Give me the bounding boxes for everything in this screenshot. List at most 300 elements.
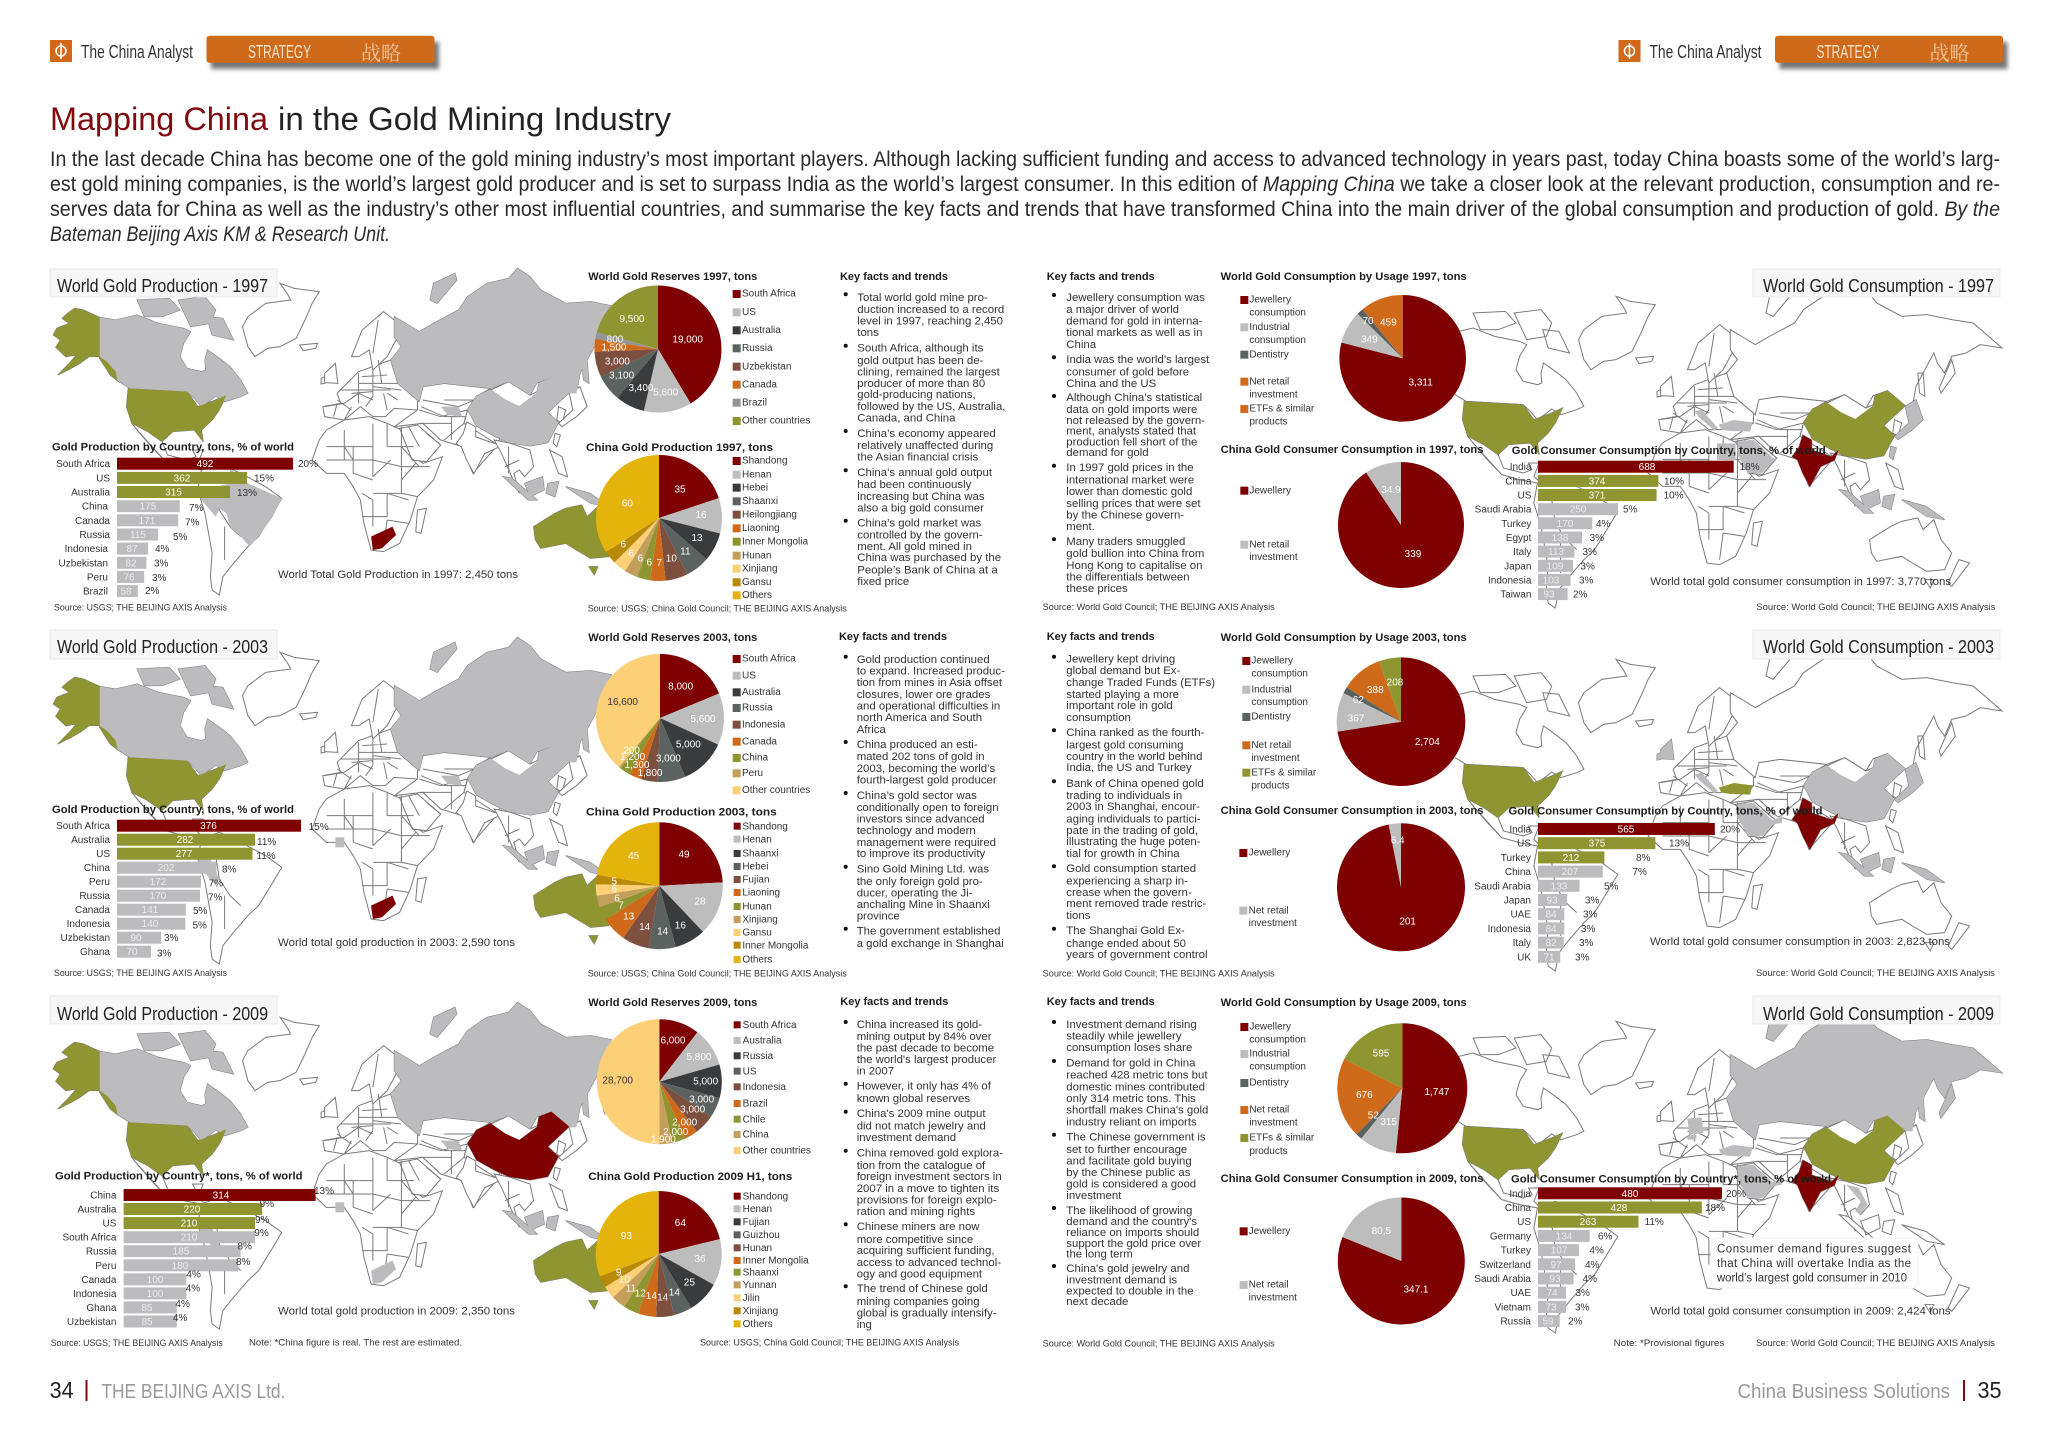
bar chart: production by country: 170	[150, 891, 167, 902]
text block: China ranked as the fourth-	[1066, 727, 1205, 739]
text block: industry reliant on imports	[1066, 1116, 1197, 1128]
bar chart: consumption by country: India	[1509, 824, 1531, 836]
bar chart: production by country: 376	[200, 821, 217, 832]
text block: Hong Kong to capitalise on	[1066, 560, 1202, 572]
heading: Key facts and trends	[839, 631, 947, 643]
pie values: 201	[1399, 916, 1416, 927]
pie values: 28	[694, 896, 706, 907]
legend: reserves	[733, 654, 810, 796]
legend: China production: Inner Mongolia	[742, 940, 809, 951]
pie values: 3,400	[628, 383, 654, 394]
legend: usage: investment	[1251, 753, 1300, 764]
icon: China Analyst logo	[1618, 40, 1640, 62]
heading: World Gold Consumption - 2003	[1763, 637, 1994, 657]
panel: reserves and China production 2009	[588, 997, 959, 1348]
pie values: 16	[675, 921, 686, 932]
pie values: 200	[623, 746, 640, 757]
bar chart: consumption by country: 428	[1611, 1203, 1628, 1214]
legend: China production: Henan	[743, 1204, 772, 1215]
text block: illustrating the huge poten-	[1066, 836, 1201, 848]
text block: in 2007	[857, 1066, 894, 1078]
icon: China Analyst logo	[50, 40, 72, 62]
text block: 2003, becoming the world’s	[857, 763, 995, 775]
legend: reserves: Australia	[742, 687, 781, 698]
pie values: 28,700	[602, 1076, 633, 1087]
bar chart: production by country: 9%	[260, 1199, 274, 1210]
legend: usage: consumption	[1249, 335, 1306, 346]
pie chart: usage 1997	[1371, 327, 1434, 390]
text block: Jewellery consumption was	[1066, 292, 1205, 304]
bar chart: consumption by country: Saudi Arabia	[1475, 505, 1532, 516]
text block: access to advanced technol-	[857, 1257, 1001, 1269]
bar chart: production by country: 8%	[236, 1257, 251, 1268]
legend: reserves: Russia	[742, 703, 773, 714]
panel: key facts consumption 2003	[1043, 631, 1275, 978]
pie values: 1,300	[624, 760, 650, 771]
text block: only 314 metric tons. This	[1066, 1093, 1196, 1105]
text block: increasing but China was	[857, 491, 985, 503]
bar chart: production by country: 8%	[238, 1242, 252, 1252]
callout	[1711, 1238, 1918, 1288]
heading: World Gold Consumption - 1997	[1763, 276, 1994, 296]
panel: world gold consumption 2003	[1221, 630, 2002, 978]
bar chart: production by country: US	[96, 849, 110, 860]
legend: usage	[1242, 656, 1317, 791]
bullets	[1052, 293, 1056, 541]
pie values: 16	[695, 510, 707, 521]
bar chart: production by country: 9%	[254, 1228, 269, 1239]
intro text block: serves data for China as well as the industry’s other most influential countries, and summarise the key facts and trends that have transformed China into the main driver of the global consumption and production of gold. By the	[50, 198, 2000, 221]
text block: Jewellery kept driving	[1066, 654, 1175, 666]
panel: world gold consumption 1997	[1221, 269, 2002, 612]
legend: reserves: Russia	[742, 343, 773, 354]
pie values: 1,747	[1424, 1087, 1450, 1098]
section tab: STRATEGY	[248, 42, 311, 62]
pie values: 315	[1380, 1117, 1397, 1128]
source: Source: USGS; China Gold Council; THE BEIJING AXIS Analysis	[588, 968, 847, 978]
bar chart: consumption by country: Italy	[1513, 938, 1531, 949]
bar chart: consumption by country: 3%	[1580, 561, 1595, 572]
callout: Consumer demand figures suggest	[1717, 1244, 1912, 1256]
pie values: 208	[1387, 677, 1404, 688]
legend: China production	[734, 821, 809, 966]
bar chart: consumption by country: 13%	[1669, 839, 1689, 850]
bar chart: consumption by country: 4%	[1589, 1246, 1604, 1257]
text block: to improve its productivity	[857, 848, 986, 860]
source: Source: World Gold Council; THE BEIJING AXIS Analysis	[1043, 602, 1275, 612]
text block: level in 1997, reaching 2,450	[857, 316, 1003, 328]
bar chart: consumption by country: 371	[1589, 490, 1606, 502]
bar chart: production by country	[52, 804, 329, 960]
text block: aging individuals to partici-	[1066, 814, 1201, 826]
text block: Sino Gold Mining Ltd. was	[857, 864, 989, 876]
pie values: 1,900	[651, 1135, 676, 1146]
bar chart: production by country: 141	[142, 905, 159, 916]
bar chart: consumption by country: 11%	[1644, 1217, 1664, 1228]
text block: 2007 in a move to tighten its	[857, 1183, 999, 1195]
bar chart: consumption by country: 8%	[1636, 853, 1651, 864]
bar chart: production by country: 172	[150, 877, 167, 888]
text block: and operational difficulties in	[857, 700, 1000, 712]
total consumption note: World total gold consumer consumption in 2009: 2,424 tons	[1650, 1306, 1951, 1318]
text block: to expand. Increased produc-	[857, 666, 1005, 678]
heading: Key facts and trends	[1047, 996, 1155, 1008]
panel: reserves and China production 2003	[586, 632, 847, 978]
text block: followed by the US, Australia,	[857, 401, 1005, 413]
text block: provisions for foreign explo-	[857, 1194, 997, 1206]
legend: China consumption: investment	[1249, 918, 1297, 929]
source: Source: World Gold Council; THE BEIJING AXIS Analysis	[1756, 1338, 1996, 1348]
bar chart: production by country: 314	[213, 1190, 230, 1202]
legend: reserves: Peru	[742, 768, 763, 779]
bar chart: consumption by country: 5%	[1623, 505, 1638, 516]
heading: World Gold Production - 2009	[57, 1004, 268, 1024]
legend: reserves: US	[742, 670, 756, 681]
bar chart: production by country: Indonesia	[65, 544, 108, 555]
pie values	[602, 1035, 719, 1146]
text block: gold bullion into China from	[1066, 548, 1204, 560]
text block: India, the US and Turkey	[1066, 762, 1192, 774]
intro text block: Bateman Beijing Axis KM & Research Unit.	[50, 223, 390, 246]
panel: world gold production 2009	[50, 996, 666, 1348]
title: in the Gold Mining Industry	[278, 101, 671, 137]
source: Source: USGS; THE BEIJING AXIS Analysis	[51, 1338, 223, 1348]
text block: ment removed trade restric-	[1066, 898, 1206, 910]
legend: reserves: Other countries	[743, 1146, 811, 1157]
pie values: 6	[614, 893, 620, 904]
bar chart: production by country: 115	[130, 530, 146, 541]
text block: tion from mines in Asia offset	[857, 677, 1003, 689]
text block: years of government control	[1066, 949, 1207, 961]
text block: acquiring sufficient funding,	[857, 1245, 995, 1257]
bar chart: consumption by country: 93	[1549, 1274, 1561, 1285]
pie values: 9,500	[619, 314, 645, 325]
text block: foreign investment sectors in	[857, 1171, 1002, 1183]
text block: not released by the govern-	[1066, 415, 1205, 427]
legend: usage: Net retail	[1251, 740, 1291, 751]
pie values: 34.9	[1381, 485, 1401, 496]
bar chart: production by country: Ghana	[86, 1303, 117, 1314]
bar chart: production by country: 7%	[208, 892, 223, 904]
legend: China consumption: investment	[1249, 552, 1298, 563]
bullets	[844, 292, 848, 523]
note: Note: *China figure is real. The rest are estimated.	[249, 1337, 462, 1347]
pie values: 35	[674, 484, 686, 495]
pie chart: usage 2003	[1369, 690, 1433, 754]
pie values: 64	[675, 1218, 686, 1229]
text block: by the Chinese govern-	[1066, 510, 1184, 522]
text block: duction increased to a record	[857, 304, 1004, 316]
text block: relatively unaffected during	[857, 440, 993, 452]
text block: important role in gold	[1066, 700, 1173, 712]
bar chart: consumption by country: Italy	[1513, 547, 1531, 558]
bar chart: production by country: Ghana	[80, 947, 110, 958]
section tab	[206, 36, 439, 69]
text block: gold output has been de-	[857, 355, 984, 367]
total consumption note: World total gold consumer consumption in 1997: 3,770 tons	[1650, 576, 1952, 588]
bar chart: consumption by country: India	[1509, 1189, 1531, 1200]
bar chart: production by country: Peru	[87, 572, 108, 583]
bar chart: production by country: 4%	[186, 1284, 200, 1294]
legend: usage: products	[1251, 780, 1290, 791]
panel: key facts production 2009	[840, 996, 1003, 1331]
pie values: 6	[621, 540, 627, 551]
legend: reserves: US	[743, 1066, 757, 1077]
text block: trading to individuals in	[1066, 790, 1182, 802]
heading: reserves: World Gold Reserves 2003, tons	[588, 632, 757, 644]
legend: China production: Guizhou	[743, 1230, 780, 1241]
pie values: 3,100	[609, 371, 635, 382]
pie values: 10	[619, 1275, 630, 1286]
bar chart: consumption by country: 3%	[1582, 547, 1597, 558]
footer: left page	[50, 1377, 285, 1403]
pie values: 6	[647, 557, 653, 568]
bar chart: consumption by country: China	[1505, 867, 1531, 878]
intro text block: est gold mining companies, is the world’s largest gold producer and is set to surpass India as the world’s largest consumer. In this edition of Mapping China we take a closer look at the relevant production, consumption and re-	[50, 173, 2000, 196]
bar chart: production by country: 140	[142, 919, 159, 930]
pie values	[616, 1218, 706, 1303]
text block: Canada, and China	[857, 412, 956, 424]
text block: more competitive since	[857, 1234, 973, 1246]
legend: usage	[1240, 1022, 1315, 1157]
heading: World Gold Production - 1997	[57, 276, 268, 296]
heading: China production: China Gold Production 2003, tons	[586, 806, 777, 818]
bar chart: consumption by country: US	[1517, 490, 1532, 502]
pie values	[1361, 316, 1433, 388]
text block: experiencing a sharp in-	[1066, 876, 1188, 888]
bar chart: production by country: Uzbekistan	[61, 933, 110, 944]
legend: China production: Hunan	[743, 1243, 772, 1254]
pie values: 45	[628, 851, 640, 862]
pie values: 6	[612, 884, 618, 895]
pie values: 52	[1368, 1110, 1379, 1121]
pie values	[601, 314, 703, 399]
callout: that China will overtake India as the	[1717, 1258, 1911, 1270]
pie values: 7	[657, 558, 663, 569]
bar chart: production by country: Gold Production by Country*, tons, % of world	[55, 1170, 302, 1182]
text block: change Traded Funds (ETFs)	[1066, 677, 1215, 689]
pie values: 13	[691, 533, 703, 544]
bar chart: production by country: Russia	[79, 530, 110, 541]
text block: support the gold price over	[1066, 1238, 1201, 1250]
text block: fourth-largest gold producer	[857, 774, 997, 786]
bar chart: consumption by country	[1474, 806, 1822, 963]
text block: technology and modern	[857, 825, 976, 837]
bar chart: production by country: 11%	[257, 837, 276, 848]
panel: world gold consumption 2009	[1221, 996, 2002, 1348]
panel: world gold production 2003	[50, 630, 666, 978]
bar chart: consumption by country: 3%	[1576, 1288, 1590, 1299]
text block: the past decade to become	[857, 1042, 994, 1054]
text block: domestic mines contributed	[1066, 1082, 1205, 1094]
heading: usage: World Gold Consumption by Usage 2009, tons	[1221, 997, 1467, 1009]
footer: right page: 35	[1978, 1377, 2002, 1403]
legend: usage: consumption	[1251, 669, 1308, 680]
pie values: 6	[638, 553, 644, 564]
pie values: 349	[1361, 334, 1378, 345]
pie values: 11	[626, 1284, 637, 1295]
bar chart: consumption by country: 2%	[1568, 1317, 1583, 1328]
bar chart: consumption by country: 170	[1557, 519, 1574, 530]
legend: reserves: Indonesia	[743, 1082, 786, 1093]
bar chart: production by country: 82	[125, 558, 137, 569]
legend: China consumption: Jewellery	[1249, 1226, 1290, 1237]
legend: China production: Hunan	[742, 550, 771, 561]
legend: China production: Shandong	[742, 456, 788, 467]
pie values	[1391, 835, 1416, 927]
bar chart: consumption by country: Gold Consumer Consumption by Country*, tons, % of world	[1511, 1174, 1831, 1186]
text block: clining, remained the largest	[857, 366, 1001, 378]
source: Source: World Gold Council; THE BEIJING AXIS Analysis	[1043, 1339, 1275, 1349]
bar chart: consumption by country: Taiwan	[1500, 590, 1531, 601]
bar chart: consumption by country: 3%	[1579, 938, 1594, 949]
text block: did not match jewelry and	[857, 1120, 986, 1132]
heading: China consumption: China Gold Consumer Consumption in 1997, tons	[1221, 444, 1483, 456]
legend: China production: Heilongjiang	[742, 509, 797, 520]
bar chart: consumption by country: 3%	[1583, 910, 1598, 921]
legend: China consumption	[1240, 1226, 1297, 1304]
legend: China production: Fujian	[743, 1217, 770, 1228]
legend: China production: Liaoning	[742, 888, 780, 899]
bar chart: consumption by country: 688	[1639, 462, 1656, 473]
source: Source: World Gold Council; THE BEIJING AXIS Analysis	[1756, 602, 1996, 612]
pie values: 595	[1373, 1048, 1390, 1059]
pie values: 3,311	[1409, 377, 1433, 388]
pie values: 7	[618, 901, 624, 912]
bar chart: production by country: Indonesia	[67, 919, 110, 930]
text block: investment demand	[857, 1132, 956, 1144]
text block: The Shanghai Gold Ex-	[1066, 925, 1185, 937]
bar chart: production by country: 4%	[175, 1299, 190, 1310]
legend: reserves: Canada	[742, 379, 777, 390]
heading: World Gold Production - 2003	[57, 637, 268, 657]
legend: usage: investment	[1249, 389, 1298, 400]
bar chart: consumption by country: 73	[1545, 1302, 1557, 1313]
bar chart: production by country: Brazil	[83, 587, 108, 598]
text block: also a big gold consumer	[857, 502, 984, 514]
legend: China production: Others	[742, 955, 772, 966]
bar chart: consumption by country: 3%	[1590, 533, 1604, 544]
pie chart: usage 2009	[1370, 1056, 1435, 1121]
bar chart: production by country: China	[90, 1190, 117, 1202]
legend: China production: Gansu	[742, 928, 772, 939]
bar chart: consumption by country: Germany	[1490, 1231, 1531, 1242]
text block: ogy and good equipment	[857, 1268, 983, 1280]
text block: ment, analysts stated that	[1066, 426, 1197, 438]
bar chart: production by country: 202	[158, 863, 175, 874]
bar chart: production by country: 11%	[256, 851, 276, 862]
heading: Key facts and trends	[840, 271, 948, 283]
legend: China production: Inner Mongolia	[743, 1256, 809, 1267]
pie values	[621, 484, 707, 569]
bar chart: consumption by country: 10%	[1664, 476, 1684, 487]
panel: key facts consumption 1997	[1043, 271, 1275, 612]
heading: usage: World Gold Consumption by Usage 1997, tons	[1221, 271, 1467, 283]
bar chart: production by country: 4%	[155, 544, 170, 555]
bar chart: consumption by country: Russia	[1500, 1317, 1531, 1328]
text block: Africa	[857, 724, 886, 736]
text block: China produced an esti-	[857, 739, 978, 751]
legend: China production	[734, 1191, 809, 1330]
legend: reserves: South Africa	[742, 654, 796, 665]
legend: China production: Gansu	[742, 577, 771, 588]
heading: China production: China Gold Production 1997, tons	[586, 442, 773, 454]
text block: demand and the country's	[1066, 1216, 1197, 1228]
bullets	[1052, 1020, 1056, 1268]
world map 2003 production	[53, 637, 666, 964]
heading	[50, 630, 277, 659]
heading: usage: World Gold Consumption by Usage 2003, tons	[1221, 632, 1467, 644]
bar chart: consumption by country: 93	[1546, 896, 1558, 906]
text block: change ended about 50	[1066, 938, 1186, 950]
text block: China removed gold explora-	[857, 1148, 1003, 1160]
pie values: 16,600	[607, 697, 638, 708]
bar chart: consumption by country: Indonesia	[1488, 924, 1531, 935]
text block: pate in the trading of gold,	[1066, 825, 1198, 837]
pie values: 800	[607, 334, 624, 345]
bar chart: consumption by country: Turkey	[1501, 1246, 1531, 1257]
bar chart: production by country: 90	[130, 933, 142, 944]
bar chart: production by country: China	[84, 863, 110, 874]
bar chart: consumption by country: 20%	[1720, 824, 1740, 836]
bar chart: production by country: 2%	[145, 586, 160, 597]
bar chart: consumption by country: 84	[1545, 910, 1557, 921]
legend: China production: Jilin	[743, 1293, 760, 1304]
legend: usage	[1240, 295, 1315, 428]
legend: usage: products	[1249, 417, 1288, 428]
bar chart: consumption by country: 7%	[1632, 867, 1647, 878]
text block: South Africa, although its	[857, 342, 984, 354]
legend: usage: Dentistry	[1249, 1078, 1289, 1089]
pie values: 5,800	[686, 1052, 712, 1063]
bar chart: consumption by country: 2%	[1573, 590, 1588, 601]
pie values: 347.1	[1403, 1284, 1429, 1295]
legend: usage: Jewellery	[1249, 1022, 1291, 1033]
bar chart: production by country: 175	[140, 502, 157, 513]
legend: reserves: Other countries	[742, 785, 810, 796]
legend: reserves: Brazil	[743, 1099, 768, 1110]
bar chart: consumption by country: 82	[1545, 938, 1557, 949]
pie values: 5,000	[676, 739, 701, 750]
bar chart: production by country: 5%	[192, 920, 207, 932]
source: Source: USGS; THE BEIJING AXIS Analysis	[54, 602, 227, 612]
pie values: 8,000	[668, 682, 694, 693]
pie chart: China consumption 2003	[1369, 855, 1433, 919]
bar chart: consumption by country: 20%	[1726, 1189, 1746, 1200]
text block: 2003 in Shanghai, encour-	[1066, 801, 1200, 813]
pie values: 2,000	[663, 1127, 689, 1138]
bar chart: consumption by country: 3%	[1579, 575, 1594, 586]
bar chart: production by country: Indonesia	[73, 1289, 117, 1300]
bar chart: production by country: 3%	[154, 558, 169, 570]
legend: China production: Henan	[742, 469, 771, 480]
bar chart: consumption by country: UAE	[1510, 910, 1531, 921]
pie values: 60	[622, 498, 633, 509]
legend: usage: Industrial	[1249, 1049, 1290, 1060]
legend: China production: Shandong	[742, 821, 788, 832]
heading: Key facts and trends	[840, 996, 948, 1008]
pie values: 3,000	[680, 1105, 706, 1116]
text block: set to further encourage	[1066, 1144, 1187, 1156]
text block: Many traders smuggled	[1066, 536, 1185, 548]
note: Note: *Provisional figures	[1614, 1338, 1725, 1348]
bar chart: production by country: South Africa	[62, 1233, 117, 1244]
bar chart: production by country: Canada	[75, 905, 110, 916]
section tab: STRATEGY	[1816, 42, 1880, 62]
bar chart: production by country: Gold Production by Country, tons, % of world	[52, 442, 294, 454]
legend: usage: ETFs & similar	[1249, 1133, 1315, 1144]
text block: data on gold imports were	[1066, 404, 1197, 416]
